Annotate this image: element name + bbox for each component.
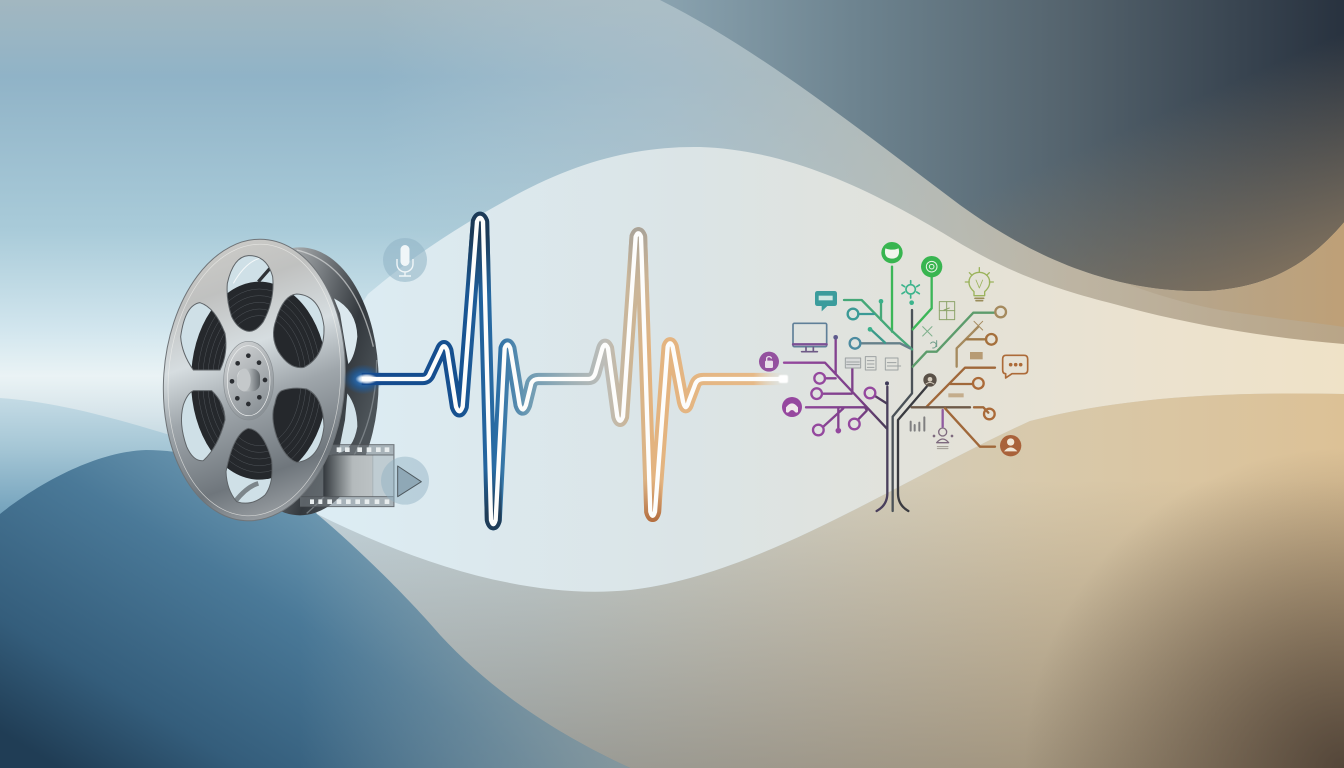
icon: microphone badge [383, 238, 427, 282]
icon: green fingerprint badge [921, 256, 942, 277]
reel hub [224, 341, 274, 420]
icon: purple lock badge [759, 352, 779, 372]
icon: gear [902, 281, 919, 298]
pulse white core [362, 218, 783, 524]
wave: top right tan band [900, 150, 1344, 327]
icon: monitor [793, 323, 827, 352]
icon: teal speech bubble [815, 291, 837, 311]
wave: bottom left dark blue [0, 450, 630, 768]
pulse tips, tan peak [628, 227, 662, 522]
icon: purple headset badge [782, 397, 802, 417]
icon: person with dots [933, 428, 953, 449]
branch end nodes [848, 299, 883, 349]
green and teal branches [844, 267, 932, 349]
icon: orange chat bubble [1003, 355, 1028, 378]
upper right branches [913, 307, 1006, 367]
heartbeat pulse line [355, 218, 788, 524]
film reel [162, 238, 381, 522]
knowledge tree of circuit branches [759, 242, 1028, 511]
icon: play button [381, 457, 429, 505]
film strip [300, 445, 394, 507]
film roll [191, 257, 328, 502]
reel back rim [221, 247, 379, 515]
reel front face [162, 238, 346, 522]
purple branches [784, 337, 887, 430]
icon: document cards [845, 357, 901, 370]
pulse bright start [355, 374, 378, 384]
icon: bar chart [911, 417, 924, 431]
wave: central light lens [300, 147, 1344, 592]
icon: small label cards [948, 352, 983, 397]
blue glow at reel exit [343, 364, 383, 394]
pulse dark tips, blue peak [466, 212, 502, 530]
icon: user badge [1000, 435, 1021, 456]
seen through openings [169, 243, 339, 517]
connector to person icon [939, 410, 946, 427]
icon: small hub node [923, 373, 937, 387]
icon: light bulb [965, 268, 993, 301]
icon: green badge top [881, 242, 903, 263]
purple nodes [811, 373, 875, 435]
icon: green cross marks [923, 327, 937, 348]
dark trunk [833, 300, 927, 511]
film strip with play button [300, 445, 429, 507]
icon: circuit panel [939, 302, 955, 320]
pulse coloured band [362, 218, 783, 524]
lower right brown branches [912, 368, 995, 447]
pulse glowing end point [779, 375, 788, 383]
wave: lower warm area [316, 394, 1344, 768]
wave: top right dark [660, 0, 1344, 291]
brown nodes [973, 378, 995, 419]
